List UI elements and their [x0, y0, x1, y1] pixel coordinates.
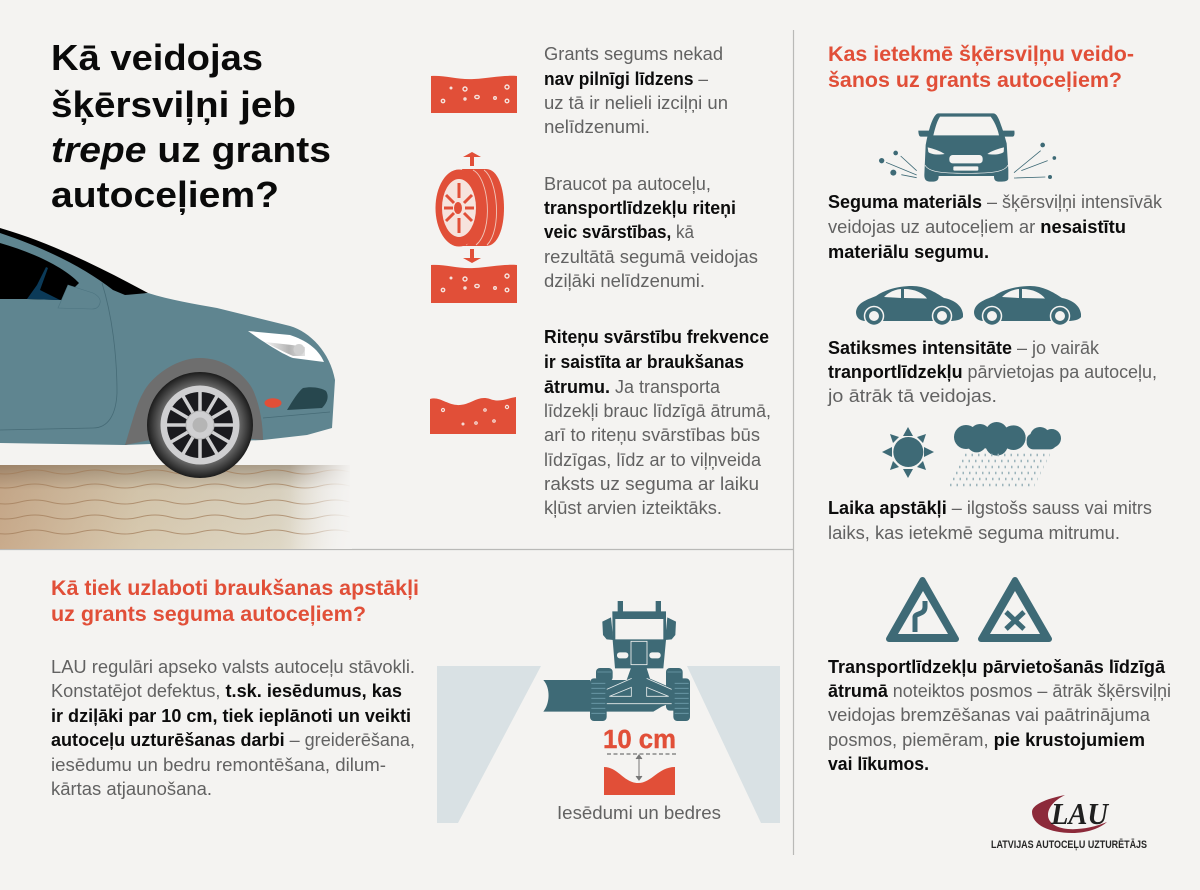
text: LAU maintenance: autoceļu uzturēšanas darbi – greiderēšana, [51, 730, 415, 750]
text: gravel surface: nav pilnīgi līdzens – [544, 69, 708, 89]
logo: LAU [991, 795, 1147, 851]
text: similar speed: ātrumā noteiktos posmos – ātrāk šķērsviļņi [828, 681, 1171, 701]
icon: road sign curves [889, 580, 956, 639]
text: oscillation frequency: kļūst arvien izteiktāks. [544, 498, 722, 518]
red marker [264, 398, 282, 408]
icon: sun [882, 427, 934, 478]
text: similar speed [828, 657, 1171, 774]
title: trepe uz grants [51, 129, 331, 170]
logo: LAU: LAU [1050, 796, 1109, 831]
icon: rain cloud [950, 422, 1061, 485]
text: similar speed: veidojas bremzēšanas vai paātrinājuma [828, 705, 1151, 725]
title [51, 37, 331, 215]
heading: improvements [51, 577, 419, 626]
text: oscillation frequency: raksts uz seguma ar laiku [544, 474, 759, 494]
road surface with waves [0, 465, 352, 549]
heading: improvements: uz grants seguma autoceļiem? [51, 603, 366, 626]
icon: wave-shaped gravel sample [430, 397, 516, 434]
text: LAU maintenance: LAU regulāri apseko valsts autoceļu stāvokli. [51, 657, 415, 677]
text: wheel oscillation: rezultātā segumā veidojas [544, 247, 758, 267]
text: weather: laiks, kas ietekmē seguma mitrumu. [828, 523, 1120, 543]
text: weather: Laika apstākļi – ilgstošs sauss vai mitrs [828, 498, 1152, 518]
text: weather [828, 498, 1152, 543]
text: similar speed: Transportlīdzekļu pārvietošanās līdzīgā [828, 657, 1166, 677]
text: LAU maintenance [51, 657, 415, 799]
title: autoceļiem? [51, 174, 279, 215]
icon: bouncing wheel [436, 152, 504, 263]
road edge shapes [437, 666, 780, 823]
text: oscillation frequency [544, 327, 771, 518]
heading: influencing factors: Kas ietekmē šķērsviļņu veido- [828, 43, 1134, 66]
text: oscillation frequency: līdzekļi brauc līdzīgā ātrumā, [544, 401, 771, 421]
divider lines [0, 30, 794, 855]
text: traffic intensity: tranportlīdzekļu pārvietojas pa autoceļu, [828, 362, 1157, 382]
text: wheel oscillation: dziļāki nelīdzenumi. [544, 271, 705, 291]
text: LAU maintenance: ir dziļāki par 10 cm, tiek ieplānoti un veikti [51, 706, 411, 726]
headlight [248, 331, 324, 362]
label: 10 cm: 10 cm [603, 726, 676, 754]
label: potholes: Iesēdumi un bedres [557, 803, 721, 823]
text: gravel surface: Grants segums nekad [544, 44, 723, 64]
heading: influencing factors: šanos uz grants autoceļiem? [828, 69, 1122, 92]
heading: improvements: Kā tiek uzlaboti braukšanas apstākļi [51, 577, 419, 600]
text: wheel oscillation [544, 174, 758, 291]
pothole diagram [604, 754, 677, 795]
text: traffic intensity [827, 338, 1157, 406]
icon: car front with flying stones [879, 113, 1056, 182]
text: similar speed: vai līkumos. [828, 754, 929, 774]
icon: two cars side view [856, 286, 1081, 326]
text: oscillation frequency: Riteņu svārstību frekvence [544, 327, 769, 347]
text: gravel surface: nelīdzenumi. [544, 117, 650, 137]
icon: gravel sample 2 [431, 265, 517, 303]
text: surface material: materiālu segumu. [828, 242, 989, 262]
text: LAU maintenance: Konstatējot defektus, t.sk. iesēdumus, kas [51, 681, 402, 701]
icon: road sign crossing [981, 580, 1049, 639]
text: similar speed: posmos, piemēram, pie krustojumiem [828, 730, 1145, 750]
text: LAU maintenance: kārtas atjaunošana. [51, 779, 212, 799]
text: surface material [828, 192, 1163, 262]
text: oscillation frequency: ir saistīta ar braukšanas [544, 352, 744, 372]
text: traffic intensity: Satiksmes intensitāte – jo vairāk [828, 338, 1100, 358]
logo: LAU: LATVIJAS AUTOCEĻU UZTURĒTĀJS [991, 839, 1147, 851]
text: traffic intensity: jo ātrāk tā veidojas. [827, 386, 997, 406]
text: wheel oscillation: transportlīdzekļu riteņi [544, 198, 736, 218]
text: oscillation frequency: arī to riteņu svārstības būs [544, 425, 760, 445]
text: surface material: veidojas uz autoceļiem ar nesaistītu [828, 217, 1126, 237]
title: šķērsviļņi jeb [51, 84, 296, 125]
text: LAU maintenance: iesēdumu un bedru remontēšana, dilum- [51, 755, 386, 775]
car illustration [0, 228, 335, 478]
fog lamp [287, 387, 328, 410]
text: wheel oscillation: veic svārstības, kā [544, 222, 695, 242]
front wheel [147, 372, 253, 478]
text: gravel surface: uz tā ir nelieli izciļņi un [544, 93, 728, 113]
icon: road grader [543, 601, 690, 721]
text: gravel surface [544, 44, 728, 137]
title: Kā veidojas [51, 37, 263, 78]
icon: gravel sample 1 [431, 76, 517, 113]
text: oscillation frequency: līdzīgas, līdz ar to viļņveida [544, 450, 762, 470]
text: wheel oscillation: Braucot pa autoceļu, [544, 174, 711, 194]
text: oscillation frequency: ātrumu. Ja transporta [544, 377, 721, 397]
text: surface material: Seguma materiāls – šķērsviļņi intensīvāk [828, 192, 1163, 212]
heading: influencing factors [828, 43, 1134, 92]
